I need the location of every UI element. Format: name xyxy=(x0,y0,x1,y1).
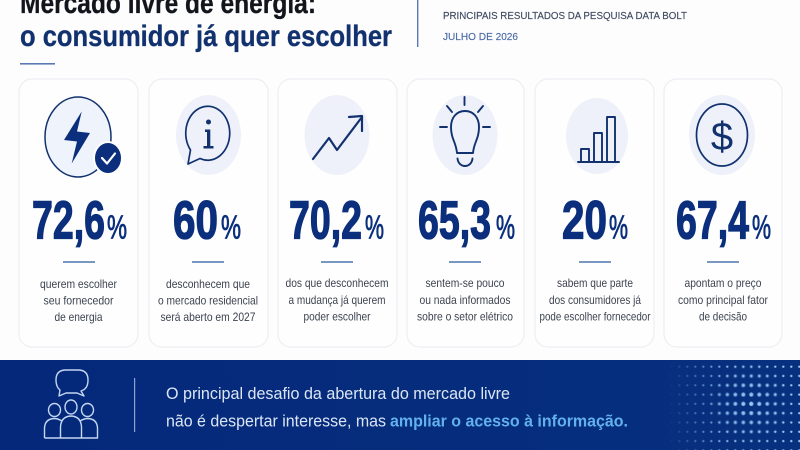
description: o mercado residencial xyxy=(158,294,258,308)
stat: 70,2 xyxy=(289,190,362,250)
stat: % xyxy=(496,208,515,246)
description: dos que desconhecem xyxy=(286,277,388,290)
icon: bar chart xyxy=(566,98,628,174)
description: apontam o preço xyxy=(684,277,762,290)
stat: 65,3 xyxy=(418,190,491,250)
stat: 60 xyxy=(173,190,218,250)
description: de decisão xyxy=(699,310,747,324)
description xyxy=(540,277,651,324)
subtitle: JULHO DE 2026 xyxy=(443,31,518,43)
description: ou nada informados xyxy=(420,294,511,307)
panel: 72,6% xyxy=(19,79,138,347)
stat: 72,6 xyxy=(32,190,105,250)
description xyxy=(417,277,513,324)
stat: % xyxy=(365,208,384,246)
description: poder escolher xyxy=(304,310,371,324)
description: sobre o setor elétrico xyxy=(417,310,513,324)
description: desconhecem que xyxy=(166,278,250,291)
stat: % xyxy=(221,208,241,246)
description xyxy=(158,278,258,324)
panel: 67,4% xyxy=(664,79,782,347)
title underline xyxy=(20,63,55,65)
subtitle: PRINCIPAIS RESULTADOS DA PESQUISA DATA BOLT xyxy=(443,10,688,22)
conclusion text: O principal desafio da abertura do mercado livre xyxy=(166,384,510,403)
title: o consumidor já quer escolher xyxy=(20,20,392,53)
description: sentem-se pouco xyxy=(426,277,504,290)
stat: % xyxy=(609,208,628,246)
header divider xyxy=(417,0,418,47)
description: pode escolher fornecedor xyxy=(540,310,651,324)
description: a mudança já querem xyxy=(288,294,386,307)
conclusion text: não é despertar interesse, mas xyxy=(166,412,386,430)
icon: people with speech bubble xyxy=(44,370,98,438)
description: sabem que parte xyxy=(557,277,633,290)
stat: % xyxy=(752,208,771,246)
icon: light bulb xyxy=(432,95,498,175)
panel: conclusion banner xyxy=(0,360,800,450)
icon: dollar coin xyxy=(689,95,755,175)
description: como principal fator xyxy=(678,294,768,307)
panel: 20% xyxy=(535,79,654,347)
panel: 60% xyxy=(149,79,268,347)
panel: 65,3% xyxy=(407,79,524,347)
description xyxy=(678,277,768,324)
conclusion text: ampliar o acesso à informação. xyxy=(390,412,628,430)
title xyxy=(20,0,392,53)
description xyxy=(286,277,388,324)
icon: bolt with check xyxy=(45,97,122,177)
conclusion text xyxy=(166,384,628,430)
description xyxy=(40,278,117,324)
panel: 70,2% xyxy=(278,79,397,347)
stat: % xyxy=(107,208,127,246)
icon: rising arrow xyxy=(304,95,370,175)
stat: 20 xyxy=(562,190,607,250)
icon: dollar coin: $ xyxy=(711,115,733,159)
description: dos consumidores já xyxy=(549,294,641,307)
description: de energia xyxy=(54,311,103,324)
stat: 67,4 xyxy=(676,190,749,250)
description: querem escolher xyxy=(40,278,117,291)
subtitle xyxy=(443,10,688,43)
icon: info bubble xyxy=(176,95,241,175)
description: seu fornecedor xyxy=(44,294,114,308)
description: será aberto em 2027 xyxy=(160,311,256,324)
